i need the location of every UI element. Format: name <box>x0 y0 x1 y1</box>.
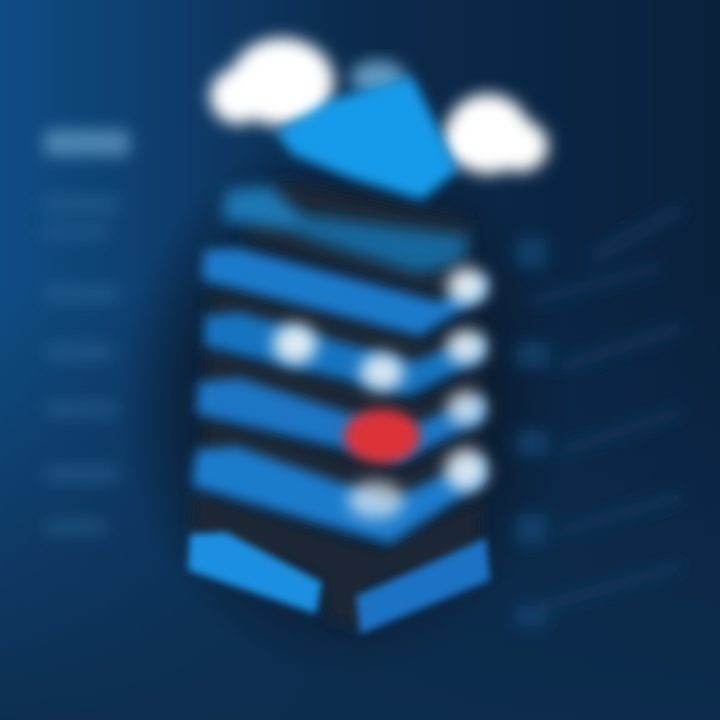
server stack <box>188 180 490 634</box>
light: center <box>360 353 404 391</box>
red alert icon <box>344 409 420 463</box>
light: right 1 <box>447 268 487 304</box>
panel: right blurred text column <box>516 200 684 626</box>
layer 4 <box>196 378 484 462</box>
right label 2 <box>516 342 550 368</box>
light: right 3 <box>447 391 485 425</box>
tower shadow <box>120 125 570 675</box>
layer 5 <box>192 446 484 544</box>
layer 3 <box>204 312 484 396</box>
light: center left <box>273 324 317 364</box>
cloud group <box>210 38 548 200</box>
dark gaps between layers <box>190 180 480 630</box>
left heading <box>44 130 130 156</box>
light: right 2 <box>446 330 486 364</box>
right label 1 <box>516 238 546 268</box>
panel: left blurred text column <box>44 130 130 534</box>
right white cloud <box>442 94 548 174</box>
small pale cloud top <box>350 60 406 96</box>
right label 4 <box>516 514 546 544</box>
white server lights <box>273 268 487 519</box>
right label 5 <box>516 606 546 626</box>
layer 1 <box>222 186 470 274</box>
right label 3 <box>516 430 548 456</box>
light: lower center <box>348 481 404 519</box>
left text lines <box>44 196 118 534</box>
left white cloud <box>210 38 334 126</box>
layer 2 <box>202 248 486 336</box>
light: right 4 <box>445 449 487 491</box>
base right slab <box>356 538 490 634</box>
blue main cloud <box>276 76 458 200</box>
base left slab <box>188 532 322 614</box>
